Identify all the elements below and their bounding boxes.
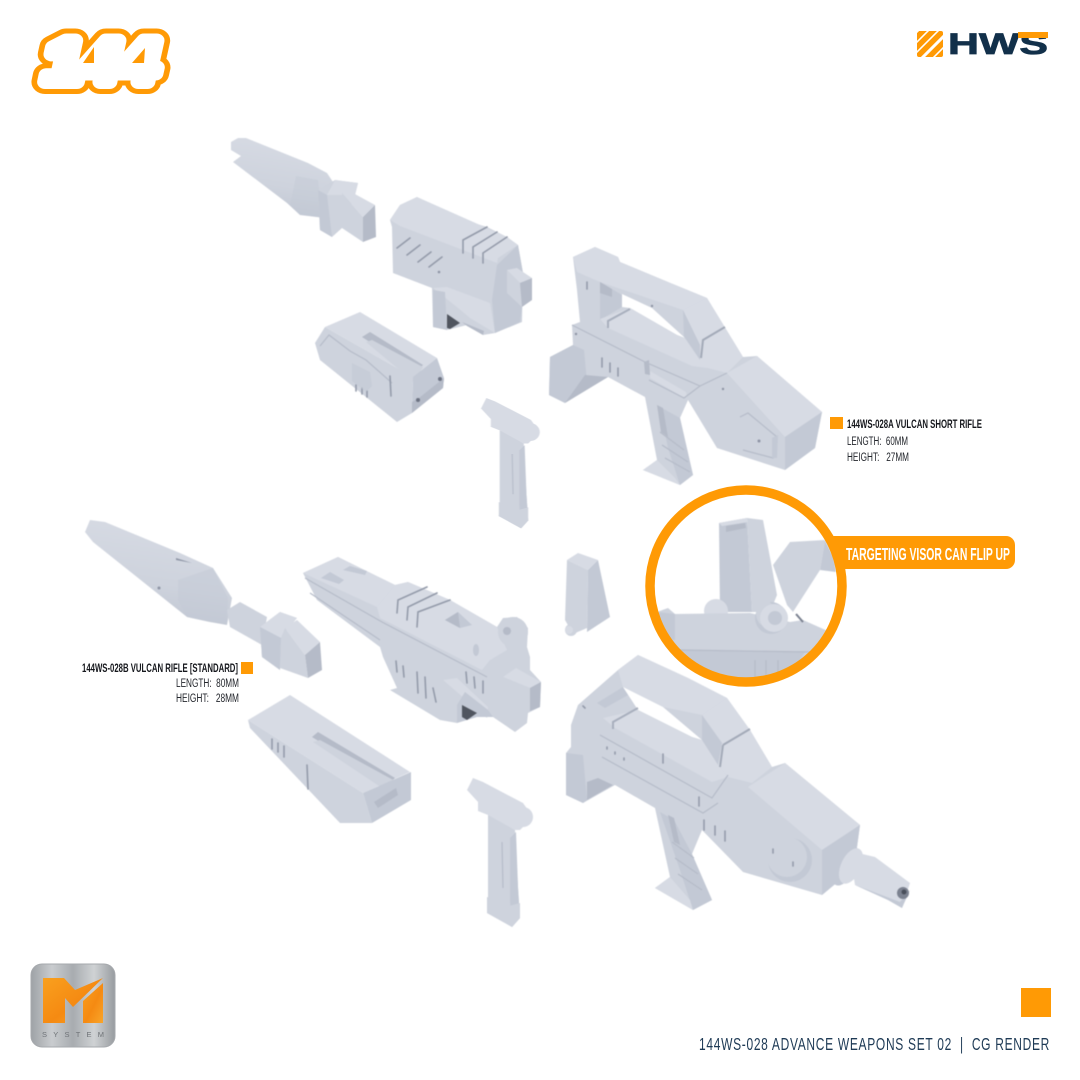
part: long rifle magazine (248, 695, 411, 823)
label: 144WS-028A vulcan short rifle (830, 417, 982, 464)
logo: HWS: HWS (948, 28, 1048, 61)
part: short rifle foregrip (481, 398, 540, 528)
logo: 144: 144 (44, 28, 158, 95)
label: 144WS-028A vulcan short rifle: LENGTH: 60MM (847, 436, 908, 448)
part: short rifle magazine (315, 312, 444, 422)
label: 144WS-028B vulcan rifle: LENGTH: 80MM (176, 678, 239, 690)
callout: targeting visor (825, 536, 1015, 569)
part: long rifle barrel (85, 520, 322, 678)
part: targeting visor (565, 553, 610, 636)
part: standard rifle body (566, 655, 910, 910)
part: short rifle receiver (390, 197, 532, 335)
part: short rifle barrel (231, 138, 376, 242)
logo: M system: SYSTEM (42, 1030, 104, 1039)
front box (727, 356, 822, 437)
logo: HWS (917, 31, 1048, 57)
accent square (1021, 988, 1051, 1017)
label: 144WS-028B vulcan rifle: 144WS-028B VULCAN RIFLE [STANDARD] (82, 661, 238, 675)
label: 144WS-028A vulcan short rifle: HEIGHT: 27MM (847, 452, 909, 464)
part: long rifle receiver (303, 557, 541, 732)
rear grip (549, 345, 587, 403)
detail circle: visor zoom (645, 485, 847, 687)
logo: M system (31, 964, 115, 1047)
stock lower (660, 407, 693, 485)
handle top (573, 247, 707, 310)
label: 144WS-028B vulcan rifle: HEIGHT: 28MM (176, 693, 239, 705)
label: 144WS-028B vulcan rifle (82, 661, 253, 705)
side channel (650, 371, 687, 397)
logo: 144: 144 (44, 28, 158, 95)
part: standard rifle foregrip (467, 778, 533, 927)
label: 144WS-028A vulcan short rifle: 144WS-028A VULCAN SHORT RIFLE (847, 417, 982, 431)
part: short rifle body (549, 247, 822, 485)
